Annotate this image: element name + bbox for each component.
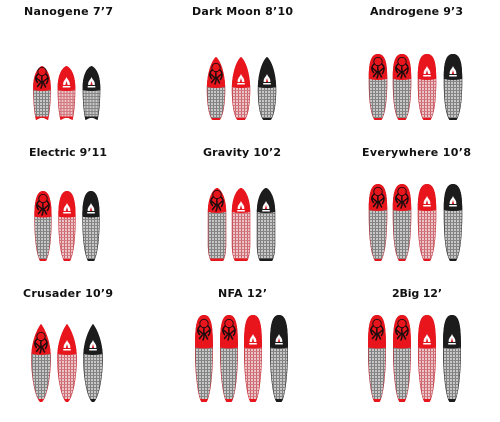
board: black	[82, 66, 100, 120]
board: red flame	[58, 66, 76, 120]
board: black	[258, 57, 276, 120]
board: red dragon	[206, 57, 226, 120]
board: red dragon 2	[220, 315, 238, 402]
board: black	[444, 184, 462, 261]
title: Electric 9’11	[29, 146, 107, 159]
board: red dragon	[34, 191, 52, 261]
title: Dark Moon 8’10	[192, 5, 293, 18]
title: Nanogene 7’7	[24, 5, 113, 18]
title: Gravity 10’2	[203, 146, 281, 159]
board: red dragon 1	[195, 315, 213, 402]
board: red flame	[418, 54, 436, 120]
board: black	[443, 315, 461, 402]
board: red dragon 2	[392, 54, 412, 120]
board: red dragon 1	[368, 54, 388, 120]
board: red dragon 2	[393, 315, 411, 402]
panel: Everywhere 10'8	[362, 146, 471, 265]
title: Crusader 10’9	[23, 287, 113, 300]
board: red flame	[244, 315, 262, 402]
panel: NFA 12'	[195, 289, 288, 402]
panel: Crusader 10'9	[23, 287, 113, 405]
panel: Electric 9'11	[29, 146, 107, 265]
panel: Nanogene 7'7	[24, 5, 113, 125]
title: Everywhere 10’8	[362, 146, 471, 159]
panel: Dark Moon 8'10	[192, 5, 293, 125]
board: black	[256, 188, 276, 261]
board: red dragon 1	[368, 315, 386, 402]
board: red flame	[232, 188, 250, 261]
panel: 2Big 12'	[368, 289, 461, 402]
board: red flame	[418, 184, 436, 261]
board: black	[444, 54, 462, 120]
board: black	[83, 324, 103, 402]
board: red flame	[418, 315, 436, 402]
panel: Androgene 9'3	[368, 7, 462, 120]
board: black	[82, 191, 100, 261]
board: red dragon	[33, 66, 51, 120]
board: red flame	[57, 324, 77, 402]
board: black	[270, 315, 288, 402]
title: NFA 12’	[218, 287, 267, 300]
panel: Gravity 10'2	[203, 146, 281, 265]
board: red dragon 1	[368, 184, 388, 261]
board: red flame	[232, 57, 250, 120]
board: red flame	[58, 191, 76, 261]
title: 2Big 12’	[392, 287, 442, 300]
board: red dragon	[31, 324, 51, 402]
board: red dragon	[208, 188, 226, 261]
title: Androgene 9’3	[370, 5, 463, 18]
board: red dragon 2	[392, 184, 412, 261]
